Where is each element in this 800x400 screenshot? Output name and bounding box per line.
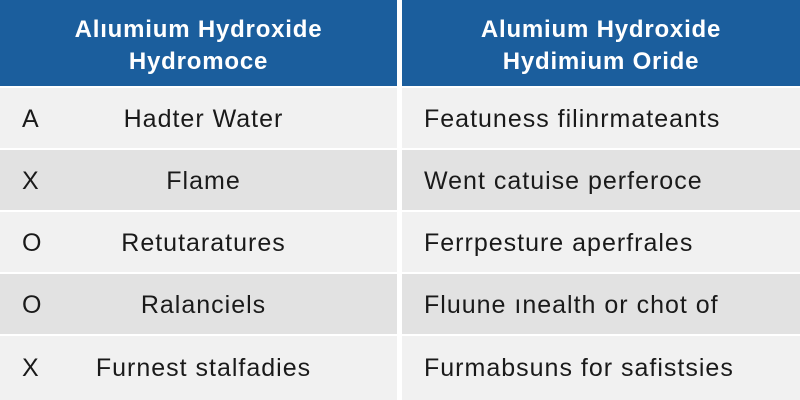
row 4 left — [0, 274, 397, 334]
row 3 right — [402, 212, 800, 272]
row 2 left: Flame — [166, 167, 241, 195]
header left: Hydromoce — [129, 48, 268, 74]
row 4 right: Fluune ınealth or chot of — [424, 291, 719, 319]
row 5 left: Furnest stalfadies — [96, 354, 311, 382]
row 2 left: X — [22, 167, 40, 195]
row 3 left: O — [22, 229, 42, 257]
row 4 left: Ralanciels — [141, 291, 266, 319]
row 3 left: Retutaratures — [121, 229, 286, 257]
row 3 left — [0, 212, 397, 272]
row 1 left — [0, 88, 397, 148]
row 5 left: X — [22, 354, 40, 382]
header left — [0, 0, 397, 86]
row 4 right — [402, 274, 800, 334]
row 4 left: O — [22, 291, 42, 319]
row 1 left: A — [22, 105, 40, 133]
header left: Alıumium Hydroxide — [75, 16, 322, 42]
row 3 right: Ferrpesture aperfrales — [424, 229, 693, 257]
row 2 right: Went catuise perferoce — [424, 167, 703, 195]
row 5 right — [402, 336, 800, 400]
row 5 left — [0, 336, 397, 400]
row 1 left: Hadter Water — [124, 105, 283, 133]
header right: Hydimium Oride — [503, 48, 699, 74]
row 1 right: Featuness filinrmateants — [424, 105, 720, 133]
row 2 left — [0, 150, 397, 210]
header right — [402, 0, 800, 86]
row 1 right — [402, 88, 800, 148]
header right: Alumium Hydroxide — [481, 16, 721, 42]
row 2 right — [402, 150, 800, 210]
row 5 right: Furmabsuns for safistsies — [424, 354, 734, 382]
